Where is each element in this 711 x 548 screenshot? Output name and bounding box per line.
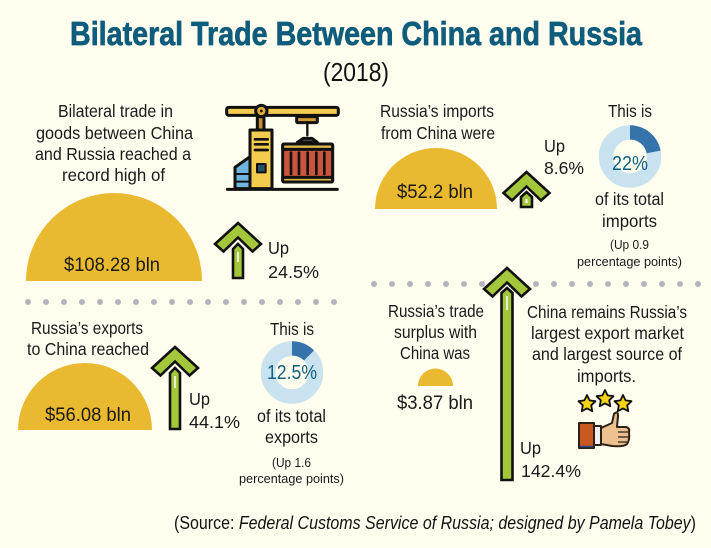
text: bilateral trade description: record high of bbox=[62, 165, 165, 185]
text: of its total imports: percentage points) bbox=[577, 254, 682, 269]
text: up 142.4% bbox=[520, 438, 581, 481]
text: of its total imports: (Up 0.9 bbox=[610, 237, 649, 252]
text: bilateral trade description: and Russia reached a bbox=[35, 144, 191, 164]
semicircle: surplus size bbox=[418, 368, 453, 386]
panel: bilateral trade bbox=[26, 101, 338, 282]
text: surplus description: surplus with bbox=[394, 322, 477, 342]
panel: Russia's imports from China bbox=[375, 101, 682, 269]
text: imports description bbox=[380, 101, 495, 143]
text: up 44.1%: Up bbox=[189, 389, 210, 409]
donut: 22% of imports: 22% bbox=[612, 153, 648, 175]
text: up 44.1% bbox=[189, 389, 240, 432]
dotted divider: left bbox=[25, 299, 337, 305]
text: China remains largest market bbox=[527, 302, 687, 386]
text: up 24.5%: 24.5% bbox=[268, 262, 319, 282]
arrow: up 8.6% bbox=[504, 172, 550, 207]
donut: 12.5% of exports: 12.5% bbox=[267, 362, 317, 384]
arrow: up 142.4% bbox=[484, 268, 530, 480]
text: of its total exports: exports bbox=[265, 427, 318, 447]
text: China remains largest market: largest export market bbox=[531, 323, 684, 343]
semicircle: $52.2 bln bbox=[375, 148, 497, 209]
text: exports description: Russia’s exports bbox=[31, 318, 143, 338]
text: bilateral trade description bbox=[35, 101, 193, 185]
icon: port crane and container bbox=[227, 105, 338, 189]
dotted divider: right bbox=[371, 281, 701, 287]
icon: three stars bbox=[578, 390, 632, 411]
text: imports description: Russia’s imports bbox=[380, 101, 494, 121]
text: surplus description: China was bbox=[400, 343, 470, 363]
text: up 24.5%: Up bbox=[268, 238, 289, 258]
donut: 12.5% of exports bbox=[267, 319, 317, 396]
text: surplus description: Russia’s trade bbox=[388, 301, 484, 321]
panel: Russia's trade surplus bbox=[388, 268, 581, 481]
text: of its total imports: imports bbox=[602, 211, 657, 231]
semicircle: $56.08 bln bbox=[18, 363, 152, 430]
semicircle: $56.08 bln: $56.08 bln bbox=[45, 405, 131, 426]
text: of its total exports: of its total bbox=[257, 406, 326, 426]
donut: 22% of imports: This is bbox=[608, 101, 652, 121]
text: of its total exports: percentage points) bbox=[239, 471, 344, 486]
value: $3.87 bln: $3.87 bln bbox=[397, 393, 473, 414]
semicircle: $52.2 bln: $52.2 bln bbox=[397, 182, 473, 203]
text: bilateral trade description: Bilateral trade in bbox=[58, 101, 173, 121]
semicircle: $108.28 bln bbox=[26, 193, 202, 281]
text: up 24.5% bbox=[268, 238, 319, 282]
text: of its total exports: (Up 1.6 bbox=[272, 455, 311, 470]
arrow: up 44.1% bbox=[152, 347, 198, 429]
arrow: up 24.5% bbox=[215, 223, 261, 278]
text: up 8.6%: Up bbox=[544, 136, 565, 156]
text: China remains largest market: imports. bbox=[577, 366, 636, 386]
text: up 8.6%: 8.6% bbox=[544, 158, 584, 178]
donut: 12.5% of exports: This is bbox=[270, 319, 314, 339]
text: up 142.4%: Up bbox=[520, 438, 541, 458]
title: Bilateral Trade Between China and Russia bbox=[70, 15, 643, 52]
text: surplus description bbox=[388, 301, 484, 363]
text: exports description bbox=[27, 318, 149, 359]
text: China remains largest market: China remains Russia’s bbox=[527, 302, 687, 322]
donut: 22% of imports bbox=[606, 101, 661, 180]
panel: Russia's exports to China bbox=[18, 318, 344, 486]
text: of its total imports: of its total bbox=[595, 189, 664, 209]
text: of its total exports bbox=[239, 406, 344, 486]
text: up 142.4%: 142.4% bbox=[521, 461, 581, 481]
text: bilateral trade description: goods between China bbox=[36, 123, 193, 143]
text: of its total imports bbox=[577, 189, 682, 269]
text: up 44.1%: 44.1% bbox=[189, 412, 240, 432]
text: China remains largest market: and largest source of bbox=[532, 344, 682, 364]
semicircle: $108.28 bln: $108.28 bln bbox=[64, 255, 160, 276]
text: imports description: from China were bbox=[381, 123, 495, 143]
text: exports description: to China reached bbox=[27, 339, 149, 359]
text: up 8.6% bbox=[544, 136, 584, 178]
panel: largest market note bbox=[527, 302, 687, 448]
icon: thumbs up hand bbox=[579, 412, 629, 448]
subtitle: year: (2018) bbox=[323, 57, 389, 87]
